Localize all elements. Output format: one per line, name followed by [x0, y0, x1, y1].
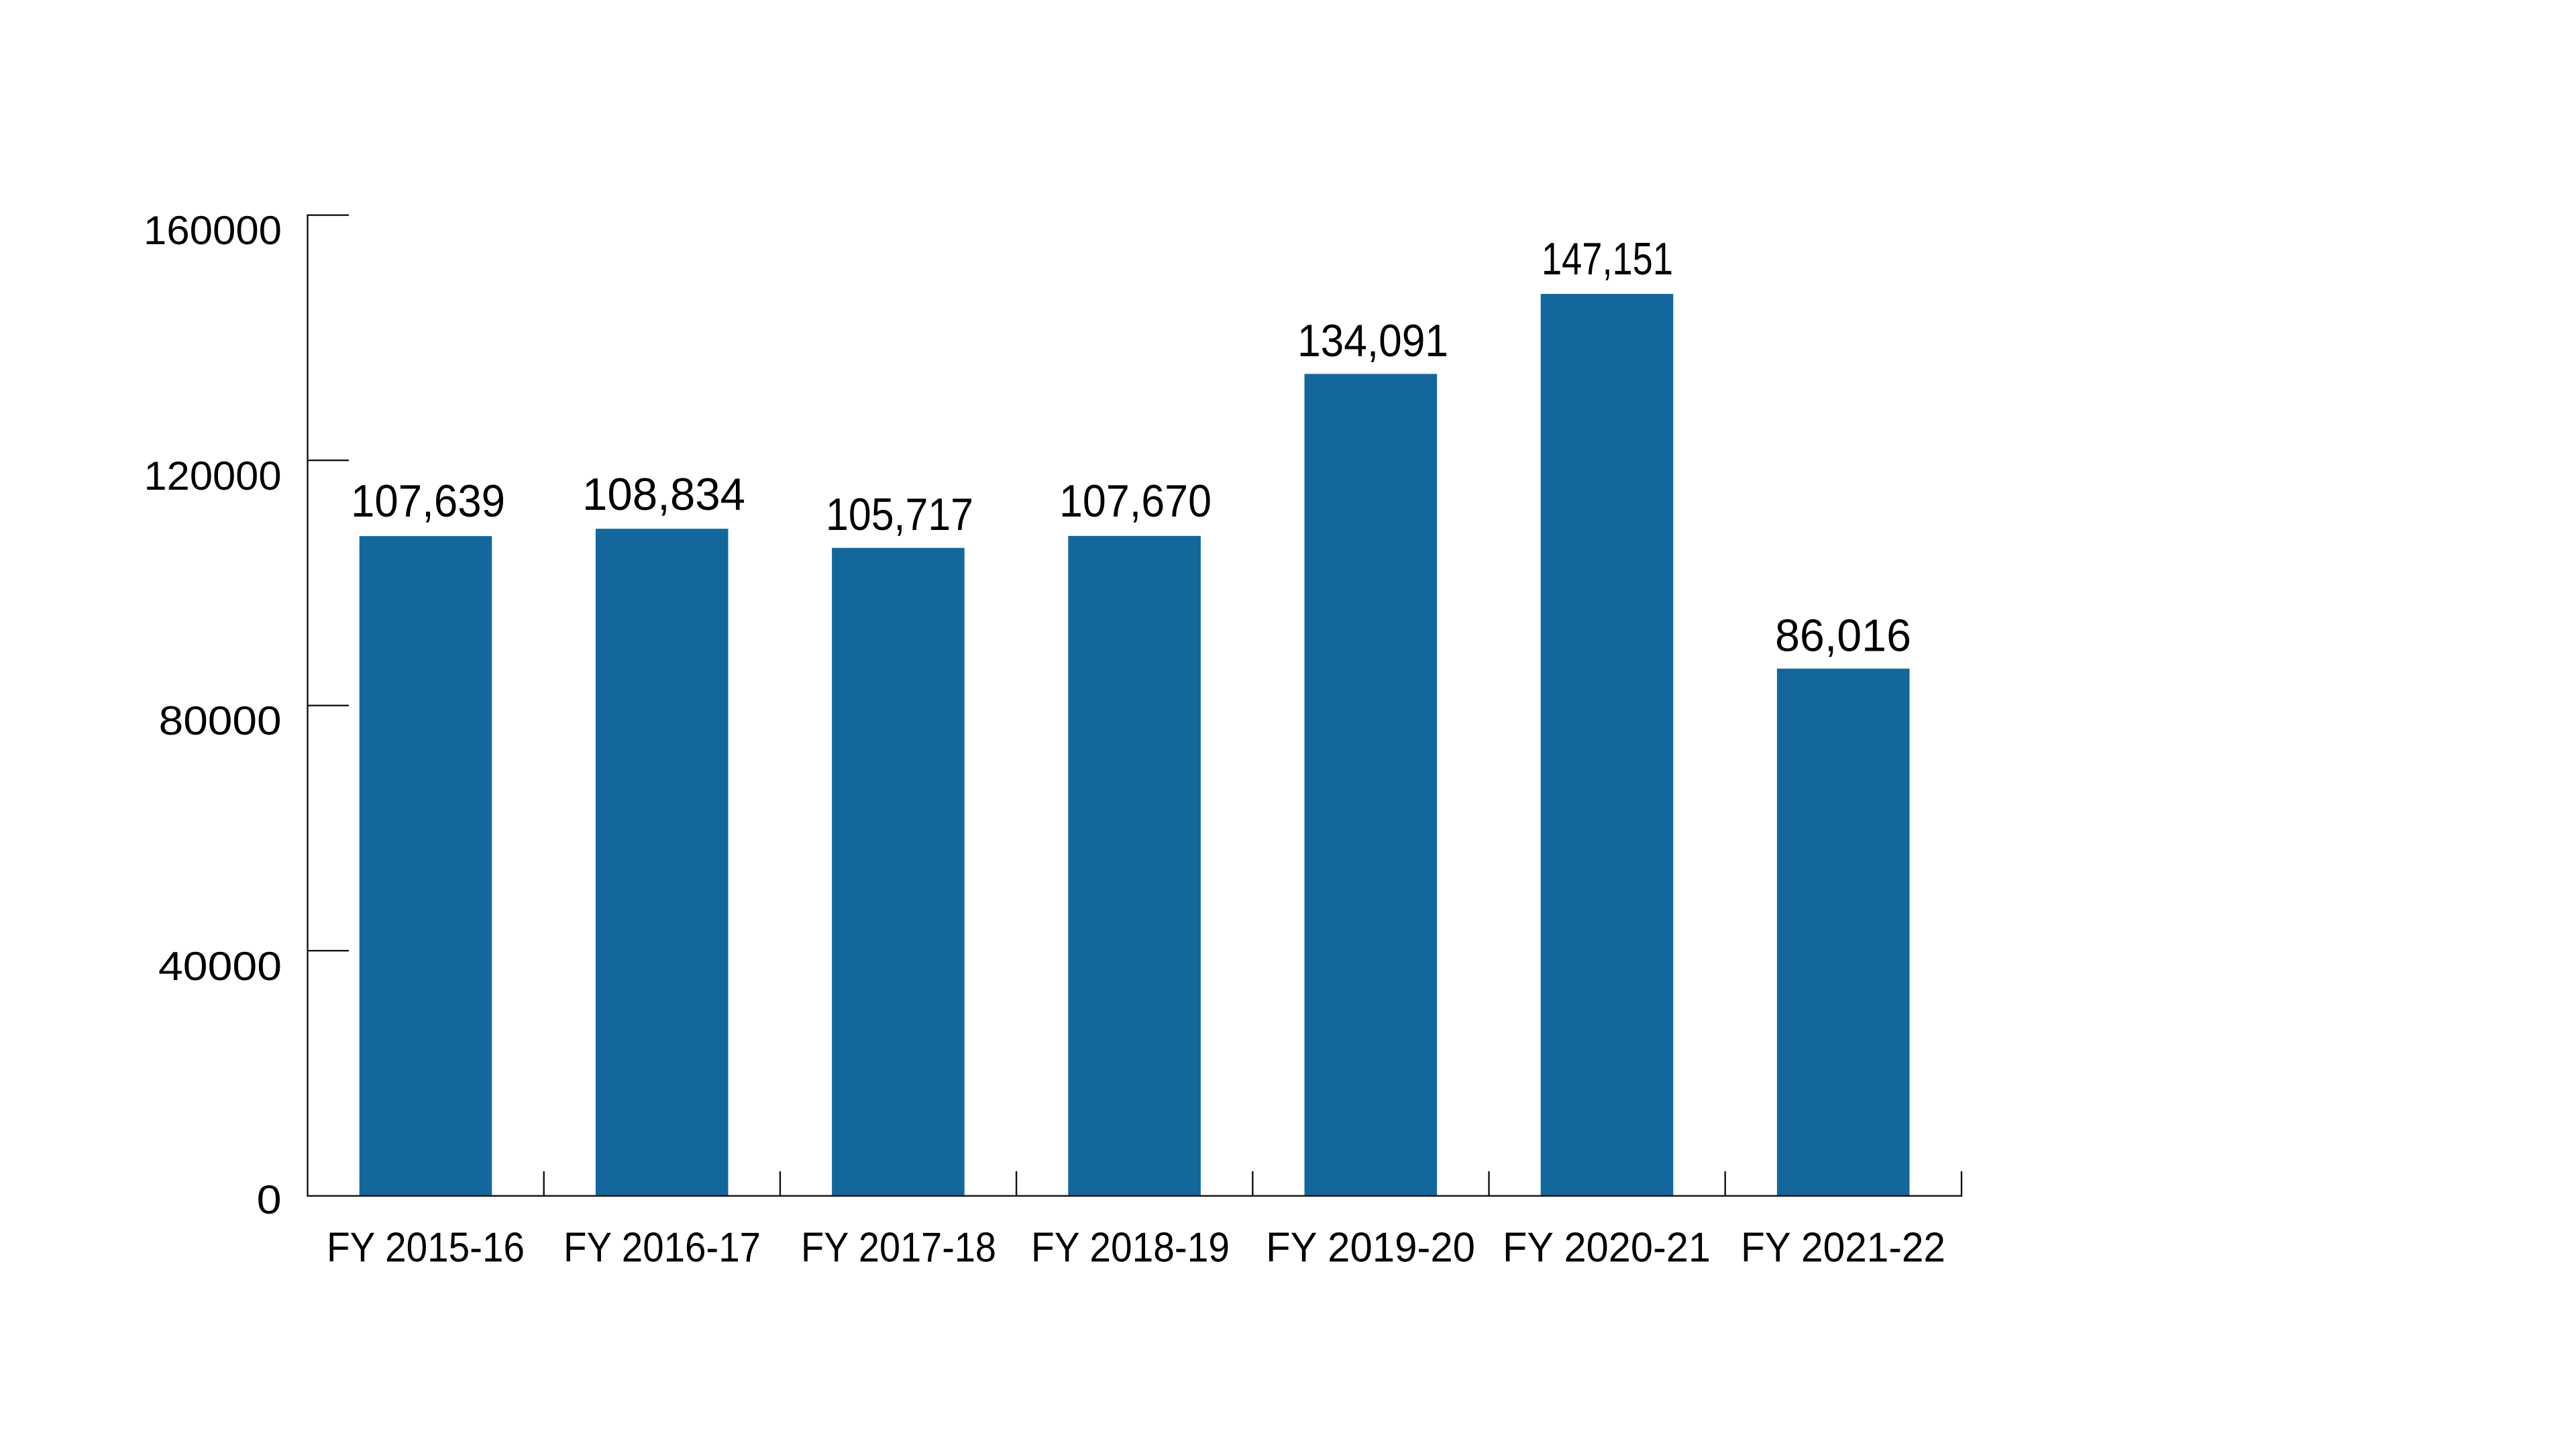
value: 105,717: 105,717: [826, 489, 973, 540]
y label: 0: 0: [257, 1177, 282, 1222]
value: 108,834: 108,834: [582, 469, 745, 520]
y label: 80000: 80000: [159, 698, 282, 743]
y axis labels: [144, 208, 282, 1222]
bar: FY 2021-22: [1777, 669, 1909, 1196]
value: 134,091: 134,091: [1297, 315, 1448, 366]
bar: FY 2015-16: [360, 536, 492, 1196]
axes and tick marks: [307, 215, 1962, 1196]
category: FY 2015-16: FY 2015-16: [327, 1225, 525, 1271]
value labels: [351, 233, 1911, 661]
bar: FY 2020-21: [1541, 294, 1673, 1196]
y label: 120000: 120000: [144, 453, 282, 498]
value: 107,670: 107,670: [1059, 476, 1212, 527]
category: FY 2020-21: FY 2020-21: [1503, 1225, 1711, 1271]
category: FY 2018-19: FY 2018-19: [1031, 1225, 1230, 1271]
category: FY 2017-18: FY 2017-18: [801, 1225, 996, 1271]
category: FY 2016-17: FY 2016-17: [564, 1225, 761, 1271]
value: 147,151: 147,151: [1542, 233, 1673, 284]
bars: [360, 294, 1910, 1196]
bar: FY 2016-17: [596, 529, 729, 1196]
value: 86,016: 86,016: [1775, 610, 1911, 661]
bar: FY 2017-18: [832, 548, 965, 1196]
value: 107,639: 107,639: [351, 476, 505, 527]
category labels: [327, 1225, 1945, 1271]
y label: 160000: 160000: [144, 208, 282, 253]
bar: FY 2019-20: [1304, 374, 1437, 1196]
y label: 40000: 40000: [158, 944, 282, 989]
bar: FY 2018-19: [1068, 536, 1201, 1196]
category: FY 2019-20: FY 2019-20: [1266, 1225, 1475, 1271]
category: FY 2021-22: FY 2021-22: [1741, 1225, 1945, 1271]
